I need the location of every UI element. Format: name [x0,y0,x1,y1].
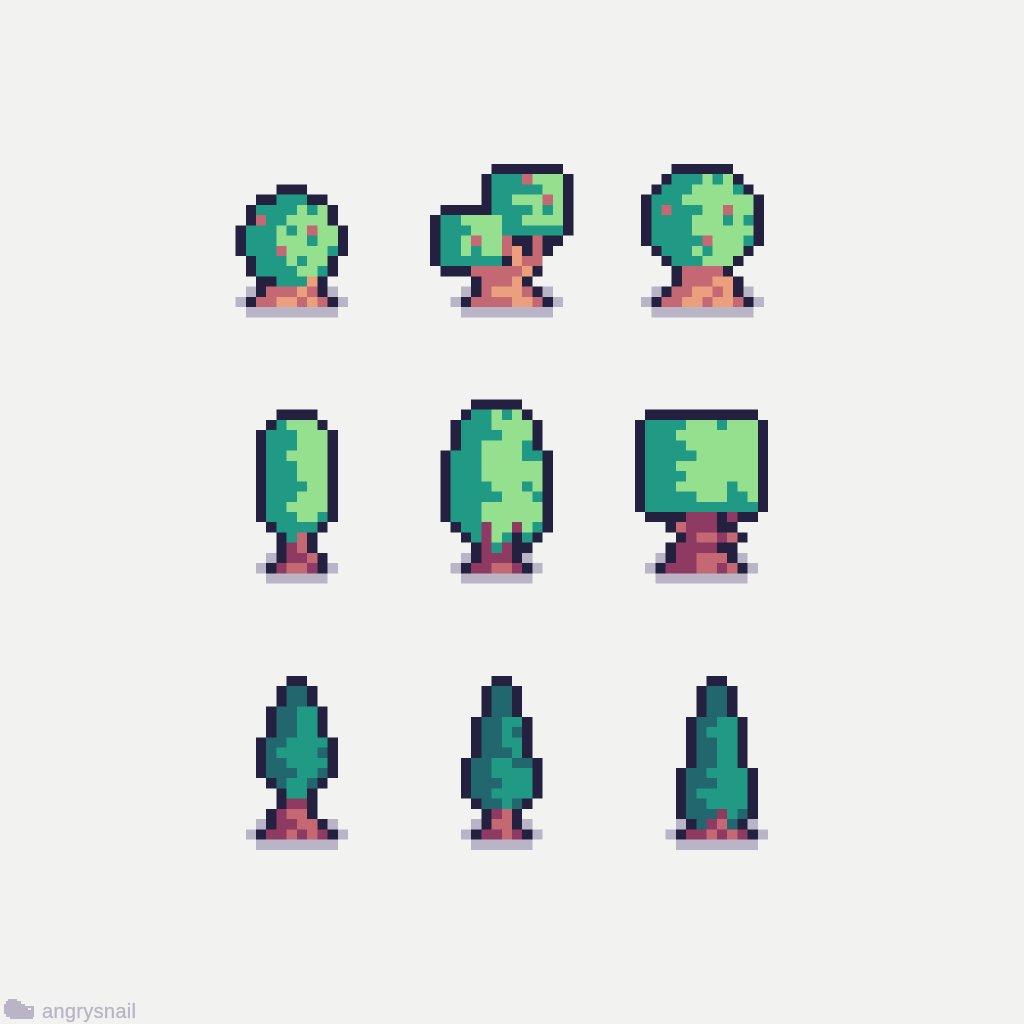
outline [676,681,758,835]
tree: large round with fruit [641,169,764,312]
trunk [686,814,748,835]
trunk [666,517,737,568]
ground shadow [641,292,764,312]
foliage [471,691,532,804]
foliage [645,425,758,507]
ground shadow [256,558,338,579]
outline [466,681,538,835]
pixel tree grid [236,169,768,845]
trunk [471,527,522,568]
outline [640,415,763,568]
foliage [440,179,563,261]
ground shadow [236,292,348,312]
tree: tall oval [445,404,548,579]
outline [241,189,343,302]
tree: double canopy [435,169,568,312]
foliage [246,200,338,282]
tree: conifer tiered [461,681,543,845]
trunk and fruit [471,179,553,302]
outline [646,169,759,302]
foliage [266,691,328,794]
trunk [481,814,522,835]
foliage [266,425,328,538]
outline [445,404,548,568]
foliage [451,415,543,548]
tree: conifer tall [666,681,768,845]
ground shadow [246,824,348,845]
trunk [266,804,328,835]
icon: snail [4,999,34,1019]
outline [256,681,338,835]
ground shadow [666,824,768,845]
foliage [686,691,748,824]
ground shadow [451,558,543,579]
tree: small round with fruit [236,189,348,312]
ground shadow [645,558,758,579]
outline [261,415,333,568]
trunk and fruit [662,210,743,302]
signature [4,999,136,1023]
trunk and fruit [256,220,328,302]
tree: narrow oval [256,415,338,579]
ground shadow [461,824,543,845]
ground shadow [451,292,563,312]
trunk [276,538,317,568]
tree: square canopy [640,415,763,579]
tree: conifer wide base [246,681,348,845]
outline [435,169,568,302]
author name: angrysnail [42,1001,136,1023]
foliage [651,179,754,261]
